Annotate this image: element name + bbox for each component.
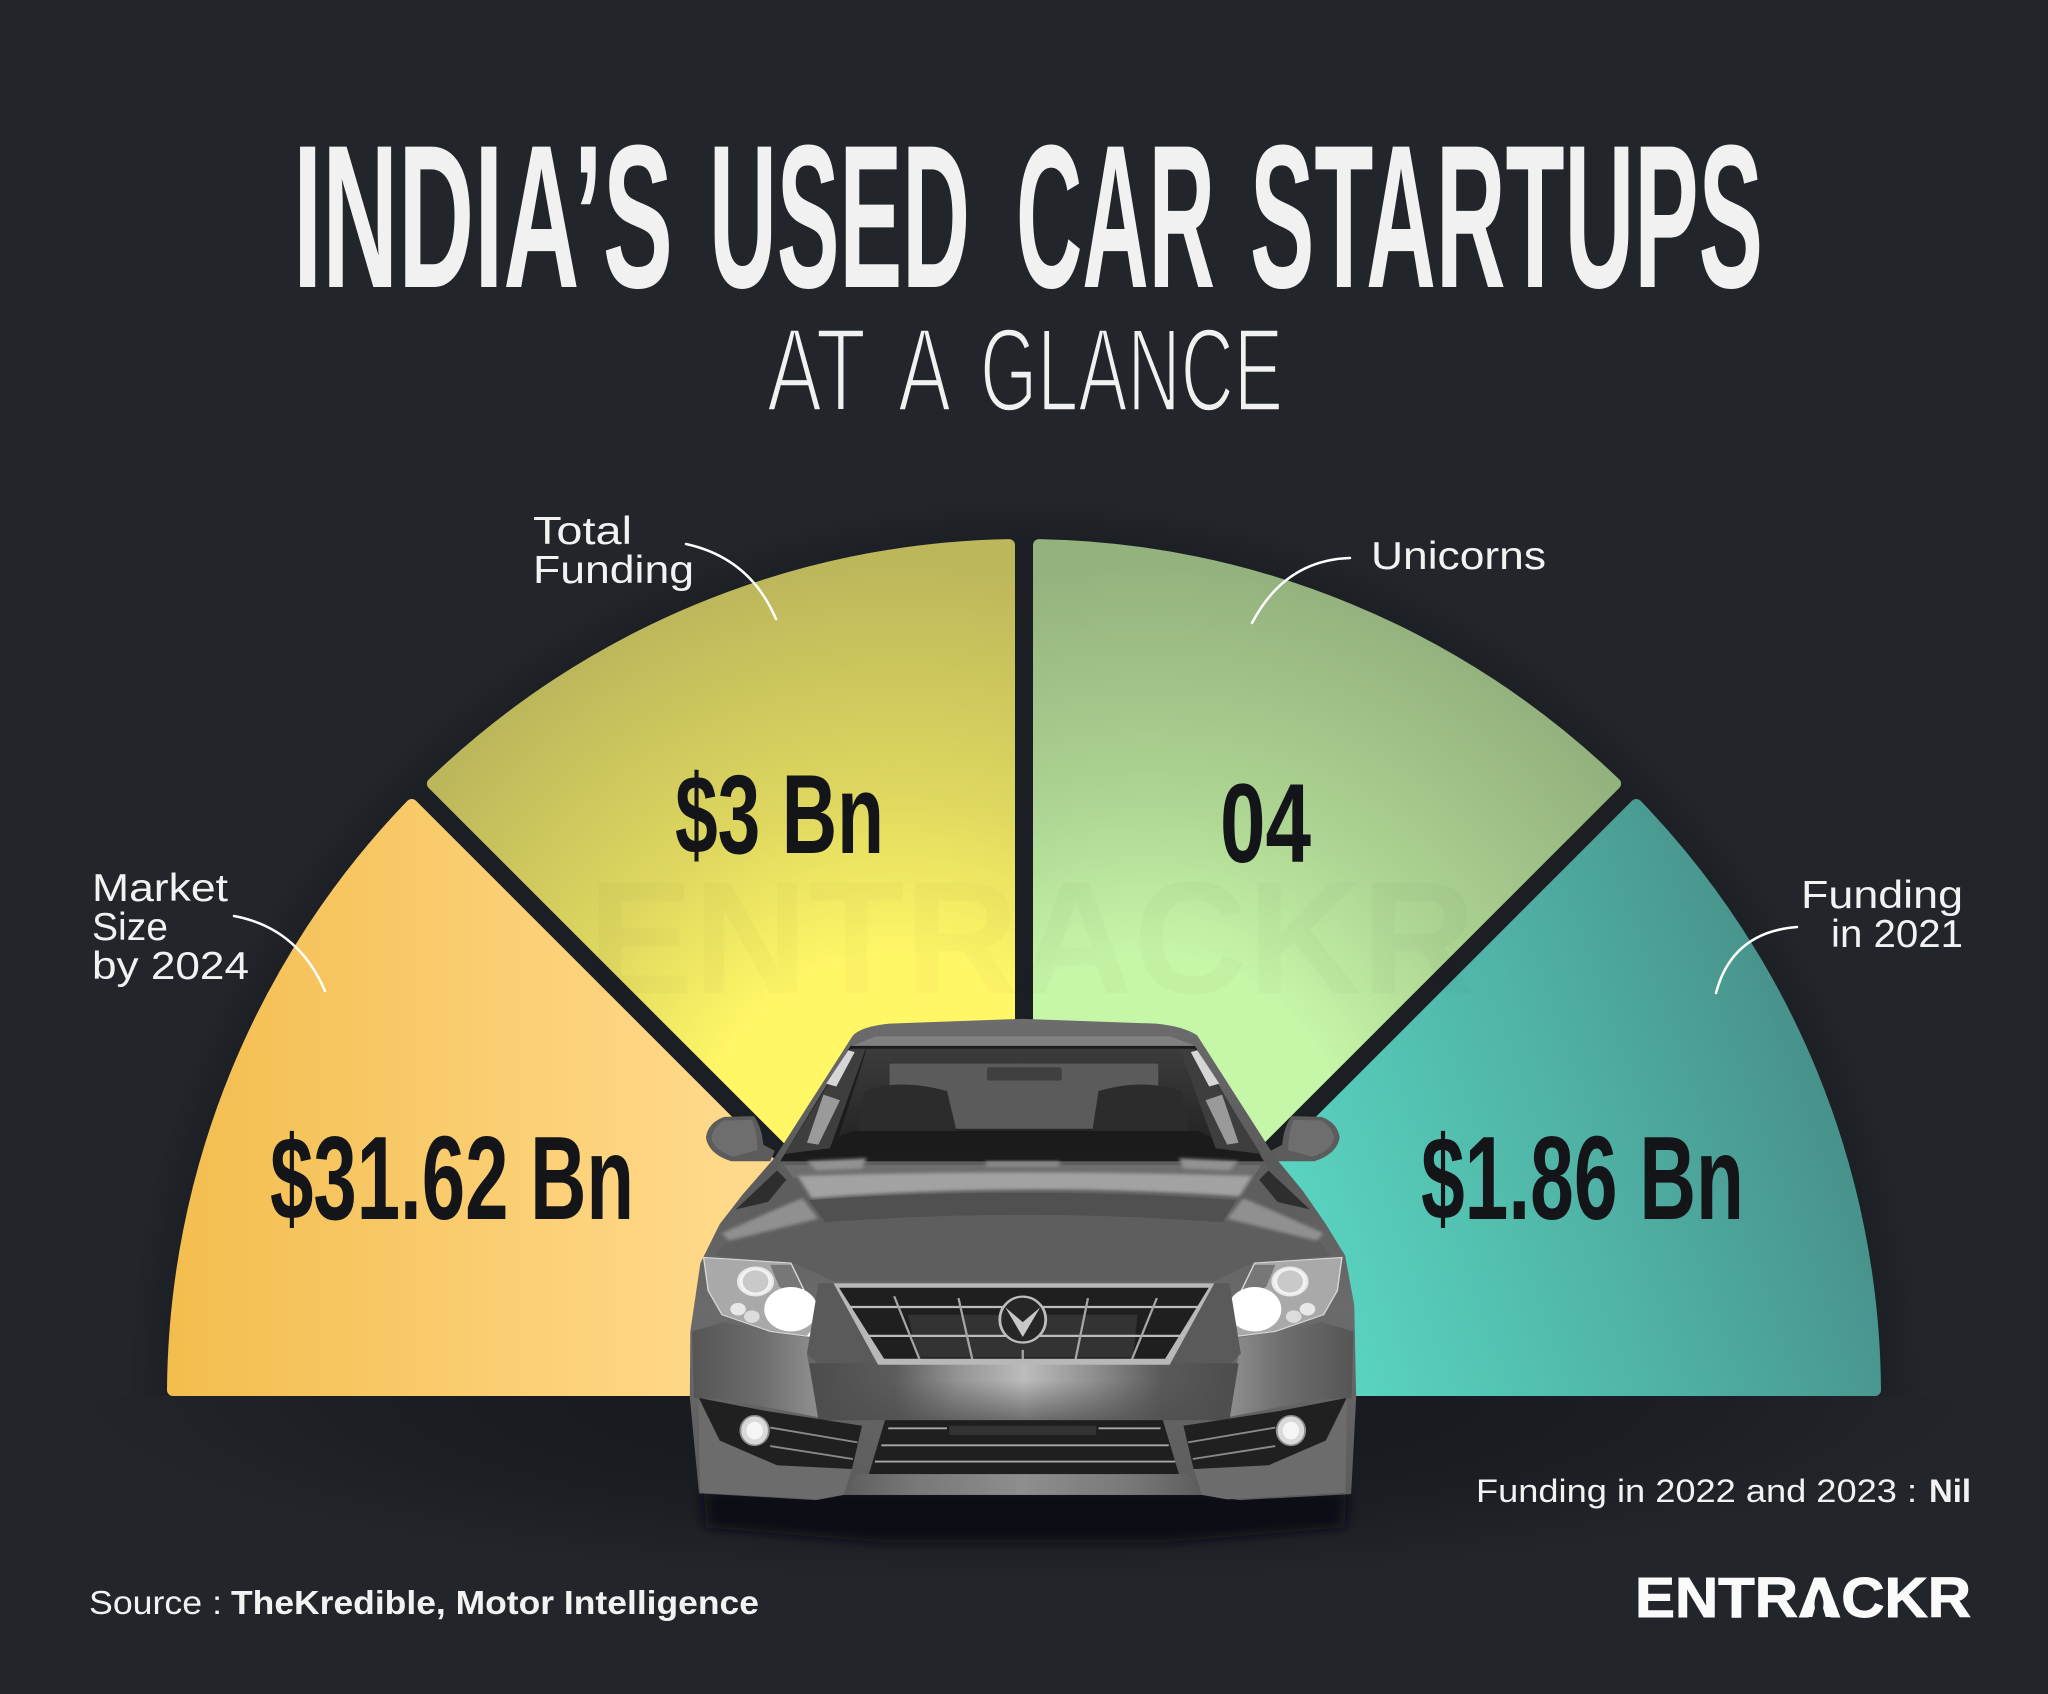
label: funding in 2021 [1801,874,1963,956]
rear window [890,1064,1158,1129]
windshield [780,1046,1264,1161]
panel: total funding wedge [433,545,1009,1360]
label: funding in 2021: in 2021 [1831,913,1963,956]
leader curve: funding in 2021 [1716,927,1797,993]
title [293,103,1763,331]
icon: solid A fill [1799,1577,1840,1617]
gauge [173,545,1875,1390]
fenders [692,1322,1353,1499]
grille surround [807,1283,1241,1365]
panel: market size wedge [173,805,997,1390]
label: unicorns: Unicorns [1371,535,1546,578]
label: market size by 2024: Size [92,906,168,949]
leader curve: unicorns [1252,558,1350,623]
value: market size: $31.62 Bn [270,1112,634,1245]
subtitle [767,304,1283,437]
rear-view mirror [987,1067,1062,1081]
car body [690,1019,1356,1500]
panel: unicorns wedge [1039,545,1615,1360]
value: total funding: $3 Bn [675,752,884,877]
lower lip [844,1474,1202,1495]
leader curve: total funding [686,544,776,619]
source: TheKredible, Motor Intelligence [231,1584,759,1621]
ground shadow [64,1396,1984,1586]
mirrors [706,1116,1340,1161]
icon: rocket cut-out in A [1812,1589,1826,1618]
note: funding 2022 and 2023: Funding in 2022 and 2023 : [1476,1473,1917,1509]
side glass [785,1049,1261,1154]
subtitle: GLANCE [980,304,1283,437]
label: total funding [533,510,694,592]
source: Source : [89,1584,222,1621]
subtitle: AT [767,304,866,437]
hood highlights [722,1158,1324,1241]
label: funding in 2021: Funding [1801,874,1963,917]
car shadow [704,1490,1347,1542]
logo: ENTRACKR: ENTRACKR [1635,1566,1971,1630]
title: CAR [1016,103,1215,331]
dashboard [793,1131,1252,1156]
front bumper [809,1363,1239,1420]
value: funding in 2021: $1.86 Bn [1421,1112,1744,1245]
subtitle: A [898,304,951,437]
glass interior [837,1049,1213,1143]
roof highlight [851,1036,1197,1047]
bumper shading [809,1363,1239,1420]
panel: funding in 2021 wedge [1051,805,1875,1390]
label: market size by 2024 [92,867,249,988]
title: USED [709,103,970,331]
label: total funding: Funding [533,549,694,592]
label: total funding: Total [533,510,632,553]
watermark: ENTRACKR [588,848,1476,1027]
headlights [704,1257,1342,1339]
lower bumper intakes [699,1398,1347,1474]
title: INDIA’S [293,103,673,331]
leader curve: market size [234,916,325,991]
gauge halo [124,496,1924,1396]
label: market size by 2024: Market [92,867,228,910]
note: funding 2022 and 2023: Nil [1929,1473,1971,1509]
car illustration [690,1019,1356,1542]
label: market size by 2024: by 2024 [92,945,249,988]
value: unicorns: 04 [1220,761,1311,886]
grille [834,1283,1214,1365]
hood [715,1162,1330,1281]
seats [857,1084,1190,1135]
